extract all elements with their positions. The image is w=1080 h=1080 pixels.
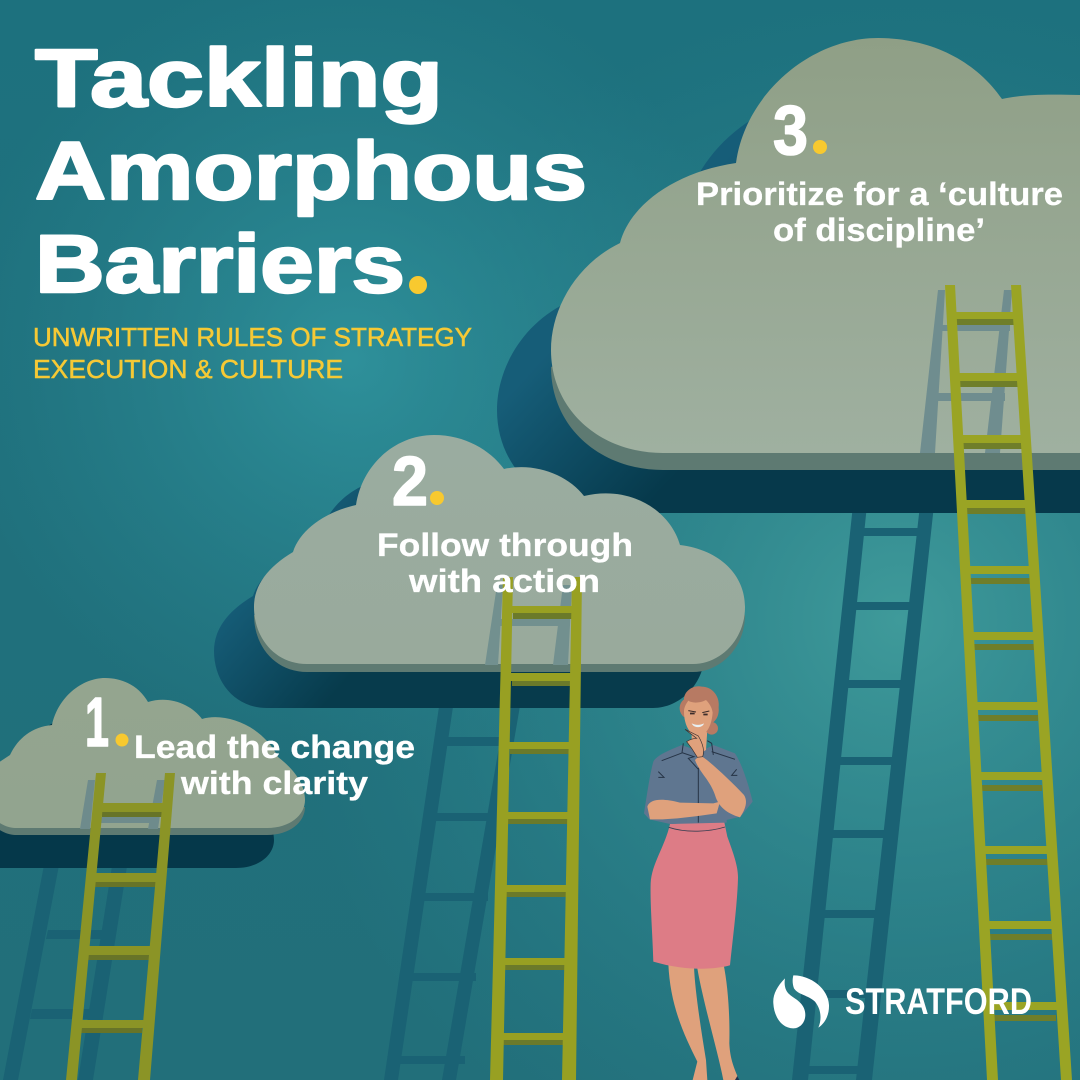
smile [692, 723, 704, 727]
cloud 2 shadow [214, 479, 705, 708]
subtitle [33, 322, 472, 384]
logo mark [773, 975, 829, 1028]
title: Barriers [35, 219, 405, 310]
cloud 1 shadow [0, 718, 274, 868]
step 1 label: with clarity [180, 765, 368, 801]
step 1 label: Lead the change [134, 729, 415, 765]
title: Amorphous [35, 126, 587, 217]
title dot [409, 276, 427, 294]
ladder shadows on wall [3, 505, 934, 1080]
eyes and brows [688, 711, 709, 713]
left forearm [647, 800, 720, 819]
panel: cloud 3 [551, 38, 1080, 470]
panel: cloud 2 [254, 435, 745, 672]
ladder 2 [490, 577, 582, 1080]
step 3 label [696, 91, 1063, 248]
cloud 3 edge [551, 117, 1080, 470]
skirt [651, 821, 738, 969]
cloud 1 edge [0, 807, 305, 835]
logo wordmark: STRATFORD [845, 981, 1032, 1022]
step 2 label: Follow through [377, 527, 633, 563]
step 3 label: 3 [773, 91, 808, 169]
cloud 1 face [0, 678, 305, 828]
title [35, 33, 587, 310]
step 2 label: with action [408, 563, 600, 599]
ladder shadow on cloud 2 [485, 585, 572, 665]
rung shadows [81, 812, 162, 1033]
waistband line [669, 827, 725, 831]
cloud 2 edge [254, 615, 745, 672]
title: Tackling [35, 33, 443, 124]
cloud 3 shadow [497, 98, 1080, 513]
panel: cloud 1 [0, 678, 305, 835]
shirt [644, 745, 753, 824]
step 1 label: 1 [85, 683, 109, 761]
ladder 1 [66, 773, 175, 1080]
rung shadows [503, 613, 574, 1045]
rung shadows [955, 319, 1056, 1021]
step 3 label: Prioritize for a ‘culture [696, 176, 1063, 212]
subtitle: UNWRITTEN RULES OF STRATEGY [33, 322, 472, 352]
shoes [735, 1076, 739, 1080]
step 2 label [377, 442, 633, 599]
cloud 3 face [551, 38, 1080, 453]
ladder shadow on cloud 3 [920, 290, 1012, 453]
shirt seams [658, 741, 737, 823]
subtitle: EXECUTION & CULTURE [33, 354, 343, 384]
ladder shadow on cloud 1 [80, 780, 165, 829]
neck [692, 730, 707, 753]
step 2 label: 2 [392, 442, 428, 520]
right forearm [695, 755, 746, 817]
woman illustration [644, 686, 753, 1080]
hand [685, 729, 703, 757]
hair bun [705, 722, 718, 735]
hair back [680, 686, 719, 723]
logo [773, 975, 1032, 1028]
ladder 3 [945, 285, 1072, 1080]
legs [668, 963, 738, 1080]
step 1 label [85, 683, 415, 801]
step 3 label: of discipline’ [773, 212, 985, 248]
cloud 2 face [254, 435, 745, 664]
face [684, 700, 713, 736]
